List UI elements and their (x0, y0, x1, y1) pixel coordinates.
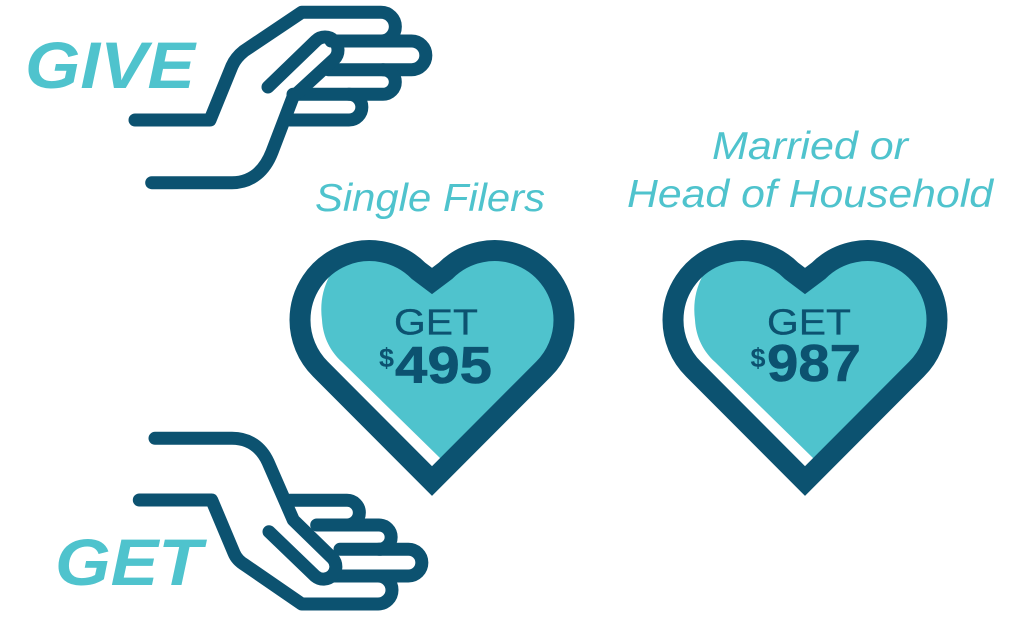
heart: single filers get $495: $ (379, 343, 394, 373)
heart: single filers get $495 (300, 251, 564, 481)
label: Single Filers: Single Filers (315, 177, 545, 220)
heart: married or head of household get $987: GET (767, 302, 851, 342)
icon: receiving hand (139, 438, 422, 604)
label: Married or Head of Household: Head of Household (627, 173, 994, 216)
icon: giving hand (135, 12, 426, 183)
label: Married or Head of Household (627, 125, 994, 216)
label: Married or Head of Household: Married or (712, 125, 910, 168)
heart: single filers get $495: GET (394, 302, 478, 342)
heart: single filers get $495: 495 (395, 336, 492, 394)
heart: married or head of household get $987: 987 (767, 334, 861, 392)
heading: GIVE: GIVE (25, 28, 197, 102)
heading: GET: GET (55, 525, 207, 599)
heart: married or head of household get $987 (673, 251, 937, 481)
heart: married or head of household get $987: $ (750, 343, 766, 373)
